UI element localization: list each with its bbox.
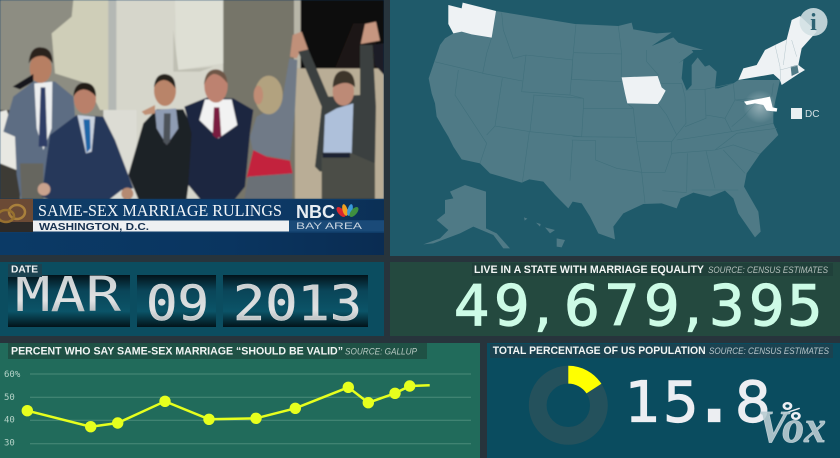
heading (8, 343, 427, 359)
percentage value: 15.8 (625, 364, 771, 438)
heading: LIVE IN A STATE WITH MARRIAGE EQUALITY (474, 264, 704, 276)
rings thumbnail (0, 199, 33, 232)
donut chart (538, 366, 601, 436)
map: Alaska (423, 185, 510, 248)
Lake Michigan (678, 50, 705, 91)
highlighted state: Maryland (744, 97, 777, 112)
icon: info: i (810, 10, 817, 36)
heading: PERCENT WHO SAY SAME-SEX MARRIAGE “SHOULD BE VALID” (11, 346, 343, 358)
month dial: MAR (15, 267, 121, 323)
person 2 (38, 83, 133, 200)
heading (472, 263, 833, 276)
highlighted states: Northeast (738, 16, 817, 85)
panel: US map (390, 0, 840, 256)
heading (490, 344, 833, 358)
y axis labels (4, 370, 21, 448)
station logo (296, 202, 363, 232)
icon: info (800, 8, 828, 36)
heading: SOURCE: GALLUP (345, 346, 418, 358)
y axis labels: 40 (4, 416, 15, 426)
station logo: BAY AREA (296, 221, 363, 232)
person 3 (128, 74, 195, 199)
y axis labels: 60% (4, 370, 21, 380)
glow around Maryland (743, 90, 777, 123)
person 5 (244, 32, 308, 199)
DC legend (791, 108, 819, 120)
banner location: WASHINGTON, D.C. (39, 222, 149, 233)
person 4 (184, 69, 253, 199)
line chart (4, 370, 471, 448)
station logo: NBC (296, 202, 335, 222)
logo: Vox: Vox (758, 401, 826, 452)
banner headline: SAME-SEX MARRIAGE RULINGS (38, 201, 282, 220)
year dial: 2013 (233, 276, 362, 332)
month dial (8, 267, 130, 327)
lower third (0, 199, 384, 233)
person 6 (298, 22, 384, 199)
data points (22, 380, 415, 432)
photo: couples on the court steps (0, 0, 384, 200)
panel: poll line chart (0, 343, 480, 458)
person 1 (3, 47, 75, 199)
panel: date (0, 262, 384, 336)
panel: share of population (487, 343, 840, 458)
highlighted state: Washington (448, 3, 496, 38)
big number: 49,679,395 (454, 274, 823, 339)
data line (27, 385, 430, 427)
panel: people living in equality states (390, 262, 840, 339)
date label (8, 264, 42, 277)
heading: TOTAL PERCENTAGE OF US POPULATION (493, 345, 706, 357)
y axis labels: 30 (4, 438, 15, 448)
map: Hawaii (524, 217, 565, 247)
highlighted state: Iowa (622, 76, 666, 104)
y axis labels: 50 (4, 393, 15, 403)
map: contiguous states (429, 3, 780, 239)
panel: news photo (0, 0, 384, 255)
date label: DATE (11, 264, 39, 276)
state borders (434, 13, 777, 203)
percentage value: % (782, 397, 801, 427)
DC legend: DC (805, 109, 819, 120)
day dial: 09 (146, 276, 209, 332)
